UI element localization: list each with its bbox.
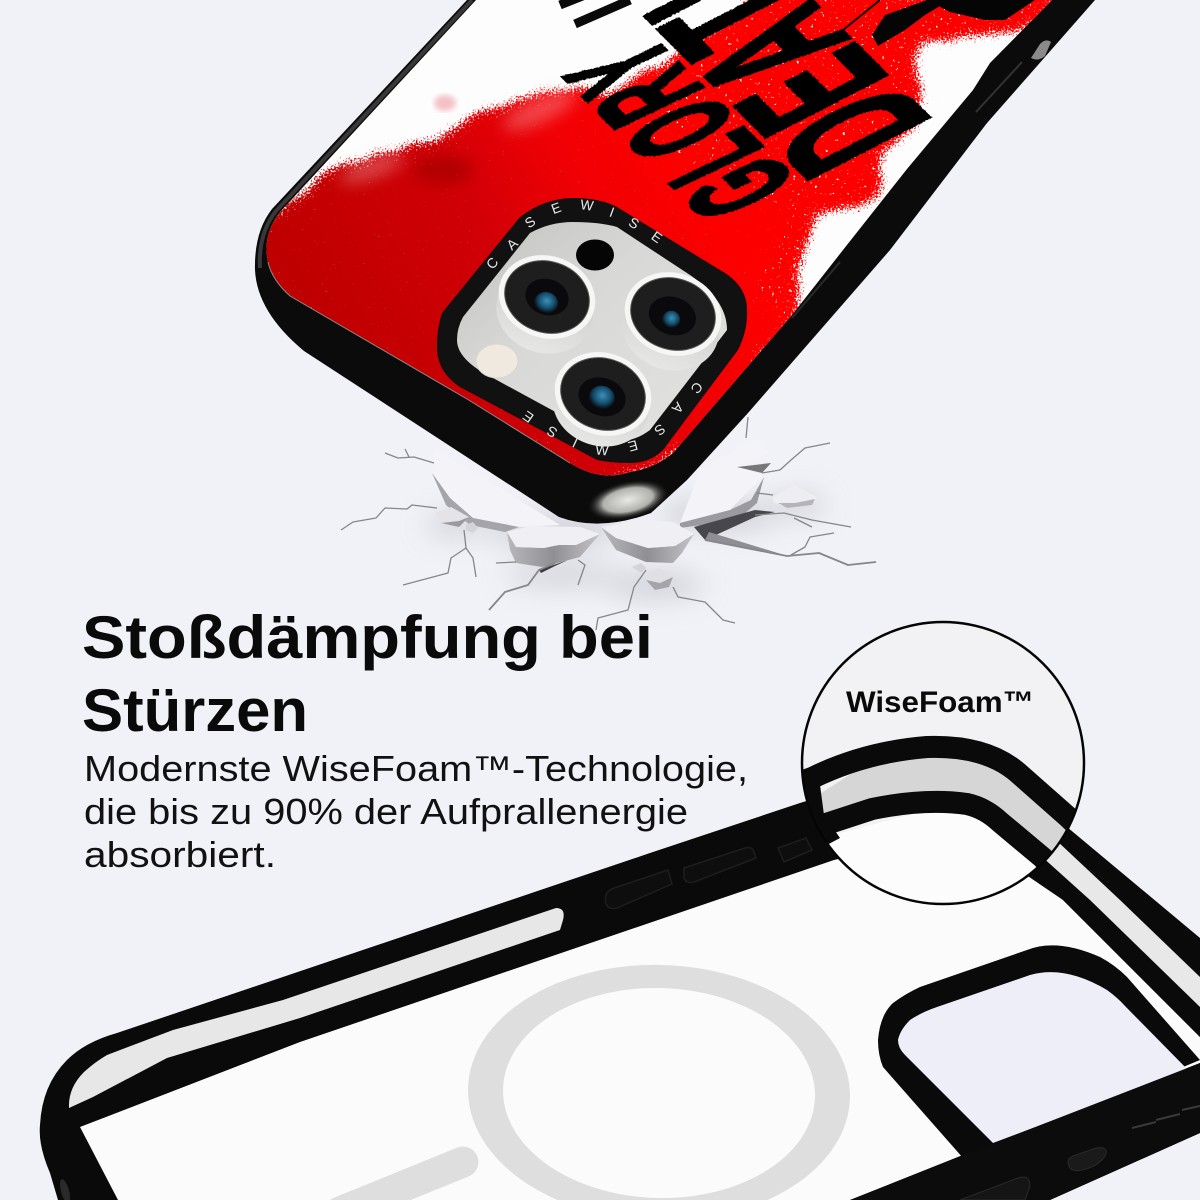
description line two: die bis zu 90% der Aufprallenergie [84, 791, 688, 832]
magnified outer rail [803, 736, 1076, 830]
heading line one: Stoßdämpfung bei [82, 604, 653, 671]
pale spray on red edge [337, 82, 581, 189]
magnifier callout: WiseFoam [800, 620, 1086, 906]
brand ring text top: I [607, 204, 617, 220]
magnified rail join [806, 786, 840, 844]
bottom glare on case [590, 482, 666, 518]
brand ring text top: E [649, 228, 665, 246]
brand ring text bottom: E [626, 437, 640, 455]
brand ring text top: E [549, 199, 563, 217]
brand ring text top: S [626, 214, 642, 232]
camera module [437, 196, 747, 463]
circle outline [802, 622, 1084, 904]
callout label: WiseFoam™ [846, 686, 1034, 719]
side buttons [792, 40, 1051, 318]
brand ring text top: C [483, 254, 501, 272]
MagSafe alignment pill [340, 1162, 463, 1200]
magnified foam strip [821, 758, 1066, 851]
silver camera plateau [457, 222, 727, 441]
case body [255, 0, 1095, 524]
center-left slab [507, 526, 600, 567]
heading line two: Stürzen [82, 677, 308, 744]
raised left plate [432, 448, 560, 527]
brand ring text top [483, 196, 665, 272]
dark triangle chip [737, 463, 771, 473]
magnified clear interior [830, 813, 1036, 902]
clear interior [80, 830, 1200, 1200]
description text [84, 748, 748, 875]
print edge highlight [268, 262, 570, 463]
brand ring text bottom: S [544, 423, 560, 441]
red paint wash [266, 0, 1052, 476]
phone with red printed case [200, 0, 1100, 527]
dark fissure [694, 510, 775, 540]
magnified inner rail [824, 790, 1052, 868]
inner rail right [980, 820, 1200, 1037]
brand ring text bottom [520, 379, 706, 459]
raised right plate [680, 438, 769, 523]
crack lines [341, 417, 876, 630]
clear case with black bumper [40, 760, 1200, 1200]
magnified content [803, 736, 1076, 876]
heading [82, 604, 653, 744]
upper rail buttons [605, 838, 812, 908]
lens one [483, 243, 608, 366]
brand ring text bottom: S [651, 421, 669, 439]
brand ring text bottom: A [668, 399, 687, 417]
black silhouette [827, 0, 1035, 46]
lens two [609, 260, 734, 383]
bottom rail upper edge [850, 1063, 1200, 1200]
flash [476, 344, 518, 378]
brand ring text bottom: E [520, 408, 536, 426]
camera bumper [437, 198, 747, 463]
slogan line one: GLORY [534, 19, 825, 237]
description line one: Modernste WiseFoam™-Technologie, [84, 748, 748, 789]
corner port on left rail [58, 1178, 72, 1200]
frost strip left [69, 908, 564, 1108]
right fissure wedge [705, 532, 791, 557]
center-right slab [601, 520, 694, 563]
brand ring text bottom: C [688, 379, 706, 397]
left plate side [432, 473, 519, 532]
faint pink stain [434, 95, 456, 111]
fissure below left rock [539, 560, 568, 573]
bottom rail port and buttons [960, 1148, 1106, 1200]
white flecks [640, 0, 1040, 330]
brand ring text top: W [579, 196, 595, 214]
printed back artwork [266, 0, 1052, 476]
right plate side [680, 477, 764, 528]
small rocks [435, 485, 817, 590]
letter fragments at top [560, 0, 630, 24]
description line three: absorbiert. [84, 834, 276, 875]
MagSafe ring [465, 960, 853, 1200]
bumper frame [40, 760, 1200, 1200]
brand ring text top: A [503, 234, 521, 253]
microphone hole [576, 240, 614, 270]
frost strip right [1010, 825, 1200, 1007]
brand ring text bottom: I [570, 435, 580, 451]
brand ring text bottom: W [595, 441, 610, 459]
crater soft shadows [425, 495, 826, 597]
rail texture marks [1132, 1106, 1200, 1128]
rail sheen on upper-left edge [260, 0, 472, 268]
brand ring text top: S [522, 213, 538, 231]
camera cutout [878, 945, 1200, 1158]
impact crater with cracks [341, 417, 876, 630]
lens three [540, 340, 663, 459]
distressed slogan text [560, 0, 932, 216]
